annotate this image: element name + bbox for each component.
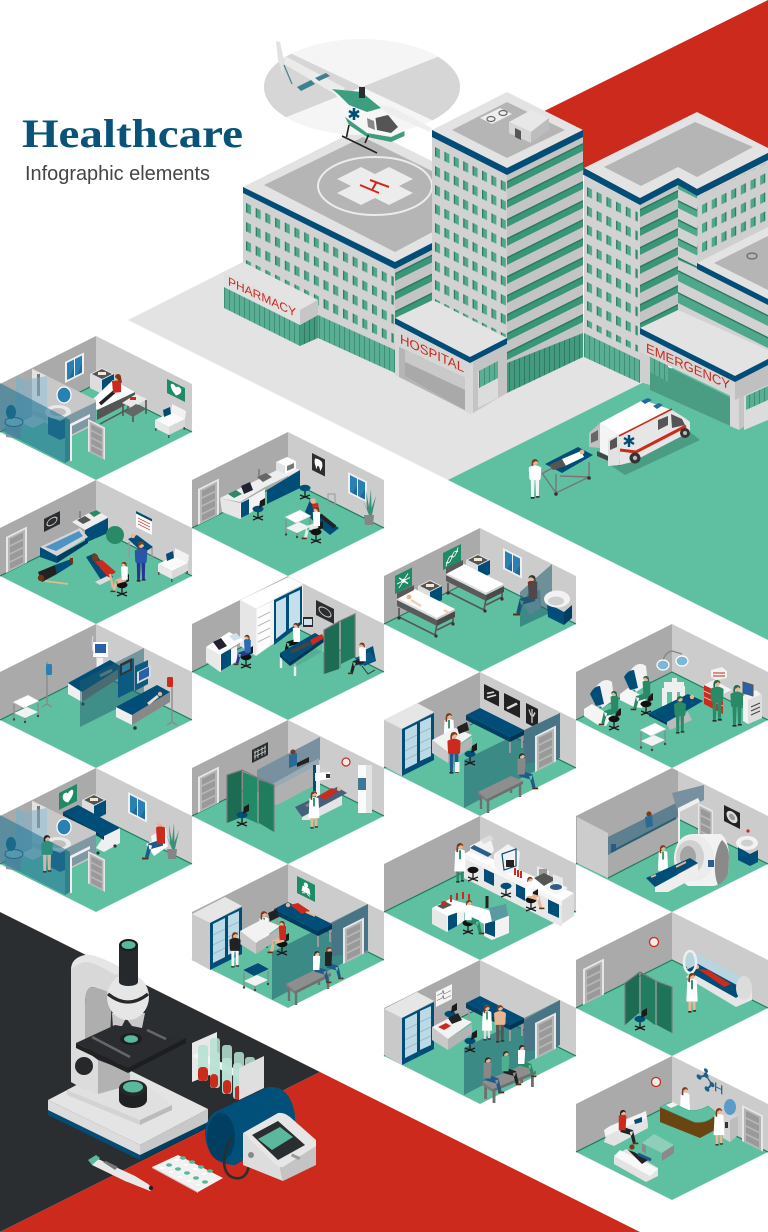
scientist seated — [526, 877, 544, 909]
teal partition — [272, 904, 368, 1000]
emergency canopy — [640, 310, 768, 430]
room: dentist — [192, 432, 384, 576]
robot console 1 — [584, 680, 614, 726]
thermometer — [88, 1155, 153, 1191]
scientist seated at front bench — [462, 900, 484, 934]
dentist — [302, 507, 323, 543]
laptop — [268, 909, 279, 921]
hyperbaric chamber — [684, 951, 752, 1007]
column top highlight — [71, 955, 125, 975]
objective head — [107, 939, 149, 1028]
office chair — [252, 498, 265, 520]
lower east annex — [678, 227, 768, 352]
analyzers — [470, 835, 568, 895]
hospital building — [224, 92, 768, 430]
coffee table — [642, 1134, 674, 1161]
monitor stand — [92, 636, 108, 670]
subtitle: Infographic elements — [25, 163, 210, 185]
blood pressure monitor — [205, 1087, 316, 1181]
rack shelf — [192, 1052, 248, 1079]
window — [128, 792, 147, 822]
hospital sign: HOSPITAL — [400, 332, 464, 375]
grey pavement — [128, 200, 660, 480]
pharmacy sign: PHARMACY — [228, 275, 297, 320]
dental chair with patient — [305, 494, 339, 535]
ecg chart — [436, 984, 452, 1007]
exam table — [466, 708, 524, 753]
clock — [652, 1078, 660, 1086]
dark lower left triangle — [0, 912, 320, 1232]
green lawn — [448, 320, 768, 640]
lower block — [71, 1040, 130, 1094]
x-ray machine — [295, 765, 347, 820]
brain scan poster — [724, 805, 740, 829]
rooftop vent pad — [480, 108, 512, 124]
folding screen — [227, 770, 274, 832]
cabinet — [90, 368, 114, 394]
desk items — [438, 1013, 462, 1030]
armchair — [146, 828, 168, 856]
wardrobe — [384, 703, 434, 776]
mri scanner — [674, 834, 729, 886]
exam table — [274, 902, 332, 947]
elderly man seated — [142, 821, 165, 859]
molecule poster — [395, 568, 412, 594]
control room partition — [257, 737, 320, 805]
mri table — [646, 858, 698, 892]
test tube rack — [192, 1032, 264, 1100]
exercise ball — [106, 526, 124, 544]
lab bench front — [432, 892, 509, 940]
emergency sign: EMERGENCY — [646, 341, 730, 393]
seated surgeons — [599, 676, 653, 730]
sign — [59, 784, 77, 810]
window — [503, 548, 522, 578]
sofa — [604, 1111, 648, 1146]
room: hyperbaric chamber — [576, 912, 768, 1056]
paramedic — [529, 459, 541, 499]
door — [583, 958, 604, 1005]
pharmacy annex — [224, 262, 318, 346]
waiting parents — [313, 947, 343, 983]
tooth poster — [312, 453, 325, 476]
room: intensive care — [0, 624, 192, 768]
rack end panel — [239, 1056, 264, 1100]
bath tub — [40, 528, 88, 563]
bench — [286, 968, 331, 1005]
robot console 2 — [620, 664, 648, 708]
operating table — [649, 694, 703, 730]
door — [535, 726, 556, 772]
room: reception — [576, 1056, 768, 1200]
stool — [236, 804, 249, 826]
door — [343, 918, 364, 964]
room: bathroom and bed with nurse — [0, 768, 192, 912]
blue grey panel — [524, 1000, 560, 1052]
red medicine cabinet — [704, 667, 732, 714]
armchair — [158, 548, 189, 582]
door — [6, 526, 27, 573]
sink — [736, 829, 758, 866]
laptop — [457, 722, 469, 734]
surgeon standing — [674, 696, 686, 734]
room: waiting exam room — [384, 960, 576, 1104]
cabinet — [466, 554, 490, 580]
desk — [206, 632, 244, 672]
tail — [284, 56, 345, 97]
exam table — [466, 996, 524, 1041]
technician — [309, 791, 319, 829]
icu bed 1 — [68, 660, 122, 706]
armchair — [155, 404, 186, 438]
room: bathroom and bed — [0, 336, 192, 480]
window — [348, 472, 367, 502]
poster — [316, 600, 334, 624]
desk — [432, 728, 472, 763]
counter — [220, 465, 300, 519]
man waiting — [518, 753, 538, 789]
window — [65, 352, 84, 383]
red diagonal band top right — [500, 0, 768, 200]
doctor seated — [282, 623, 300, 655]
plant — [165, 823, 179, 859]
patient in chair with doctor — [86, 553, 129, 596]
door — [198, 478, 219, 525]
monitor — [303, 617, 313, 627]
central tower — [432, 92, 583, 393]
sink — [544, 590, 572, 625]
dental cart — [285, 510, 311, 538]
cart — [243, 963, 269, 991]
office chair — [464, 743, 477, 765]
room: mri — [576, 768, 768, 912]
lab chairs — [468, 867, 538, 911]
nurse — [714, 1108, 724, 1146]
child patient — [286, 903, 315, 916]
iv stand red — [167, 677, 177, 725]
hose — [224, 1138, 250, 1178]
wardrobe — [192, 897, 242, 970]
sofa with patient — [614, 1144, 658, 1182]
patient — [494, 1005, 506, 1043]
title: Healthcare — [22, 111, 243, 156]
man seated — [348, 643, 366, 674]
open door — [678, 798, 713, 847]
arm recess — [85, 987, 112, 1050]
room: ultrasound exam — [192, 576, 384, 720]
mother seated — [268, 921, 289, 955]
bench — [482, 1066, 536, 1103]
chest x-ray poster — [252, 742, 268, 763]
door — [198, 766, 219, 813]
scientist standing — [454, 843, 466, 883]
blue grey panel — [524, 713, 560, 764]
bed — [446, 560, 504, 613]
ultrasound poster — [44, 511, 60, 532]
counter — [72, 510, 108, 543]
stool — [634, 1008, 647, 1030]
blue grey panel — [332, 904, 368, 956]
bed with patient — [90, 374, 135, 424]
glass partition — [80, 648, 144, 727]
doctor — [259, 911, 269, 949]
x-ray posters — [484, 684, 538, 729]
ambulance — [589, 398, 700, 475]
doctor — [444, 713, 454, 751]
logo letter: H — [714, 1079, 723, 1098]
clock — [342, 758, 350, 766]
wall cabinet with glass door — [240, 577, 303, 656]
man on sofa — [619, 1110, 638, 1144]
blue chair — [355, 646, 376, 674]
surgeons — [710, 680, 744, 727]
teal partition — [464, 1000, 560, 1095]
cabinet — [82, 794, 106, 820]
nurse — [41, 835, 53, 873]
cuff — [205, 1087, 295, 1165]
desk — [432, 1015, 472, 1050]
receptionist — [680, 1087, 690, 1123]
helicopter — [264, 39, 460, 154]
molecule logo — [697, 1064, 723, 1100]
nurse — [229, 932, 241, 968]
office chair — [464, 1030, 477, 1052]
surgical lamps — [657, 651, 688, 670]
room: robotic surgery — [576, 624, 768, 768]
room: ward with two beds — [384, 528, 576, 672]
plant — [362, 489, 376, 525]
room: x-ray — [192, 720, 384, 864]
reception desk — [660, 1102, 717, 1138]
right wing — [584, 112, 768, 383]
man exercising on floor — [38, 558, 73, 584]
bed with patient — [397, 585, 455, 638]
device body — [243, 1113, 316, 1181]
room: rehabilitation — [0, 480, 192, 624]
glass partition — [520, 564, 552, 627]
body — [332, 88, 404, 142]
pill blister pack — [152, 1155, 223, 1193]
front row tubes — [198, 1045, 242, 1100]
monitors — [118, 658, 151, 698]
man seated — [513, 575, 537, 616]
poster: heart — [167, 379, 185, 402]
stretcher with patient — [542, 447, 593, 496]
door — [535, 1012, 556, 1059]
room: orthopaedic exam — [384, 672, 576, 816]
bench — [478, 776, 523, 813]
bed — [63, 805, 120, 855]
patient with cast — [447, 732, 461, 774]
nurse at desk — [234, 635, 253, 668]
dna poster — [443, 544, 461, 570]
control room partition — [577, 768, 704, 878]
nurse — [686, 973, 698, 1013]
cabinet — [418, 580, 442, 606]
bathroom — [0, 800, 105, 895]
doctor — [482, 1005, 492, 1041]
microwave — [276, 457, 296, 474]
back row tubes — [210, 1038, 255, 1090]
rotor disc — [264, 39, 460, 135]
microscope — [48, 939, 208, 1160]
lab bench back — [464, 850, 574, 926]
room: laboratory — [384, 816, 576, 960]
red lower triangle — [0, 1072, 640, 1232]
water cooler — [723, 1099, 738, 1142]
clock — [650, 938, 658, 946]
helipad marking — [318, 157, 432, 215]
robot arms — [662, 678, 685, 706]
massage table — [128, 534, 153, 566]
sign — [297, 876, 315, 902]
stage — [76, 1025, 186, 1073]
wardrobe — [384, 992, 434, 1065]
stool — [300, 485, 310, 499]
bathroom — [0, 368, 105, 463]
door — [742, 1105, 763, 1152]
cuff opening — [207, 1113, 235, 1161]
folding screen — [625, 972, 672, 1033]
cart — [13, 695, 39, 723]
wall detector — [358, 765, 372, 813]
nurse — [658, 845, 668, 881]
nurse — [135, 542, 147, 582]
lamp — [119, 1080, 147, 1108]
icu bed 2 — [116, 685, 170, 730]
side table — [122, 394, 147, 422]
column — [71, 955, 125, 1090]
base — [48, 1063, 208, 1160]
desk — [240, 919, 280, 954]
patient chair — [522, 590, 541, 615]
waiting patients — [484, 1045, 536, 1093]
iv stand — [42, 662, 52, 707]
cart — [640, 723, 666, 751]
wall chart — [136, 511, 152, 535]
rooftop box — [509, 110, 549, 143]
helipad wing — [243, 127, 440, 373]
hospital canopy — [395, 300, 507, 414]
exam table with patient — [280, 633, 324, 676]
folding screen — [324, 614, 355, 674]
anesthesia machine — [743, 682, 762, 724]
teal partition — [464, 713, 560, 808]
room: pediatric exam — [192, 864, 384, 1008]
chair behind desk — [444, 1003, 457, 1025]
